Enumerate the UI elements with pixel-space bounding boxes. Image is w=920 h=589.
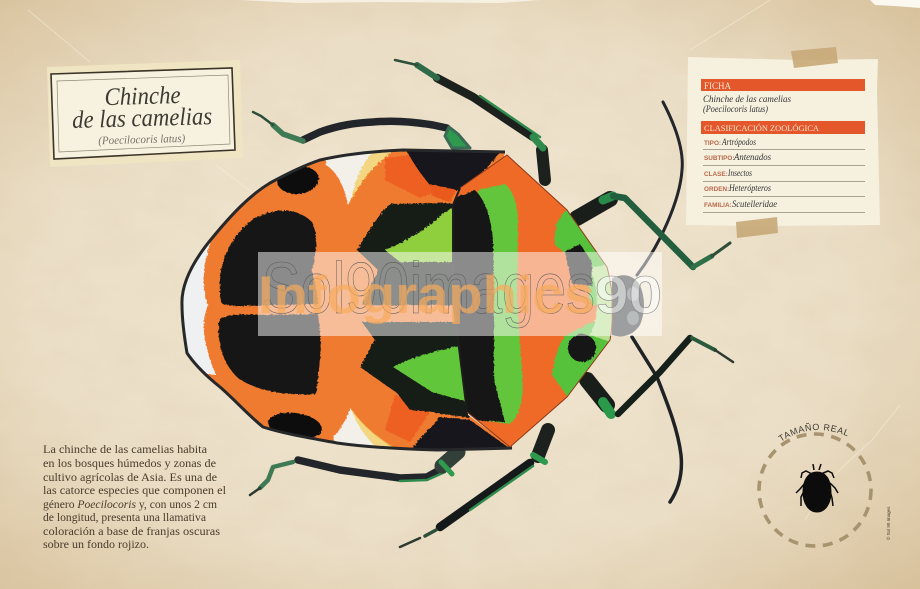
black band bottom — [410, 417, 512, 450]
big black upper — [220, 210, 318, 306]
classification rows: SUBTIPO: — [704, 155, 735, 162]
green lower — [393, 345, 468, 402]
classification rows: CLASE: — [704, 171, 728, 178]
description text: en los bosques húmedos y zonas de — [43, 456, 216, 470]
classification rows — [703, 137, 865, 212]
title text — [71, 81, 213, 148]
black spot small bottom — [267, 412, 322, 438]
watermark: Sol90images — [262, 249, 595, 329]
black band top — [407, 152, 500, 191]
big black lower — [219, 314, 321, 394]
pronotum — [452, 154, 613, 448]
watermark: 90 — [595, 266, 662, 325]
copyright: © Sol 90 Images — [885, 506, 891, 540]
heading: classification — [701, 121, 865, 134]
description text: cultivo agrícolas de Asia. Es una de — [43, 470, 217, 484]
central dark lower — [360, 322, 470, 418]
white lower patch — [334, 408, 392, 447]
black spot small top — [277, 166, 320, 195]
central dark upper — [357, 203, 462, 305]
icon: beetle silhouette — [796, 464, 838, 512]
title text: de las camelias — [72, 103, 213, 134]
black band — [454, 190, 505, 422]
orange patch by shoulder — [430, 184, 456, 202]
description text: sobre un fondo rojizo. — [43, 537, 149, 551]
label: tamaño real: TAMAÑO REAL — [778, 422, 848, 440]
title card — [47, 60, 243, 167]
green band — [478, 184, 523, 424]
deep orange edge — [215, 170, 270, 220]
classification rows: Scutelleridae — [732, 199, 777, 209]
title text: (Poecilocoris latus) — [98, 133, 186, 147]
abdomen — [180, 148, 512, 452]
common name: Chinche de las camelias — [703, 95, 791, 105]
description text — [43, 442, 227, 551]
green upper — [385, 208, 452, 263]
lower right leg with antenna — [587, 337, 733, 502]
upper rear leg — [253, 112, 470, 148]
title text: Chinche — [104, 82, 181, 111]
deep orange streak upper — [384, 154, 432, 198]
legs — [250, 60, 733, 547]
tape top — [791, 47, 838, 68]
white upper patch — [326, 150, 395, 205]
real size indicator — [757, 422, 873, 548]
description text: coloración a base de franjas oscuras — [43, 524, 220, 538]
green front lower — [552, 320, 608, 396]
classification rows: Heterópteros — [728, 183, 771, 193]
description text: La chinche de las camelias habita — [43, 442, 208, 456]
classification rows: TIPO: — [704, 140, 721, 147]
head — [612, 275, 644, 336]
heading: ficha — [701, 79, 865, 91]
tape bottom — [736, 217, 778, 238]
classification rows: Insectos — [727, 168, 752, 178]
common name: (Poecilocoris latus) — [703, 104, 768, 115]
description text: género Poecilocoris y, con unos 2 cm — [43, 497, 218, 511]
white tip — [183, 240, 216, 375]
upper middle leg — [395, 60, 545, 180]
classification rows: FAMILIA: — [704, 202, 732, 209]
pale apex — [590, 264, 612, 342]
data sheet — [686, 47, 880, 238]
lower middle leg — [400, 430, 548, 547]
beetle illustration — [170, 60, 733, 547]
dashed circle — [759, 434, 871, 546]
deep orange streak lower — [385, 395, 430, 442]
heading: classification: CLASIFICACIÓN ZOOLÓGICA — [704, 123, 820, 133]
lower rear leg — [250, 452, 458, 495]
classification rows: Antenados — [733, 152, 771, 162]
green front upper — [554, 210, 605, 306]
black spot lower — [568, 334, 596, 362]
classification rows: Artrópodos — [721, 137, 756, 147]
watermark: Infographics — [258, 266, 595, 325]
upper right leg with antenna — [577, 102, 730, 275]
heading: ficha: FICHA — [704, 81, 732, 91]
common name — [703, 95, 791, 115]
description text: las catorce especies que componen el — [43, 483, 227, 497]
black spot upper — [565, 244, 592, 286]
description text: de longitud, presenta una llamativa — [43, 510, 207, 524]
classification rows: ORDEN: — [704, 186, 729, 193]
